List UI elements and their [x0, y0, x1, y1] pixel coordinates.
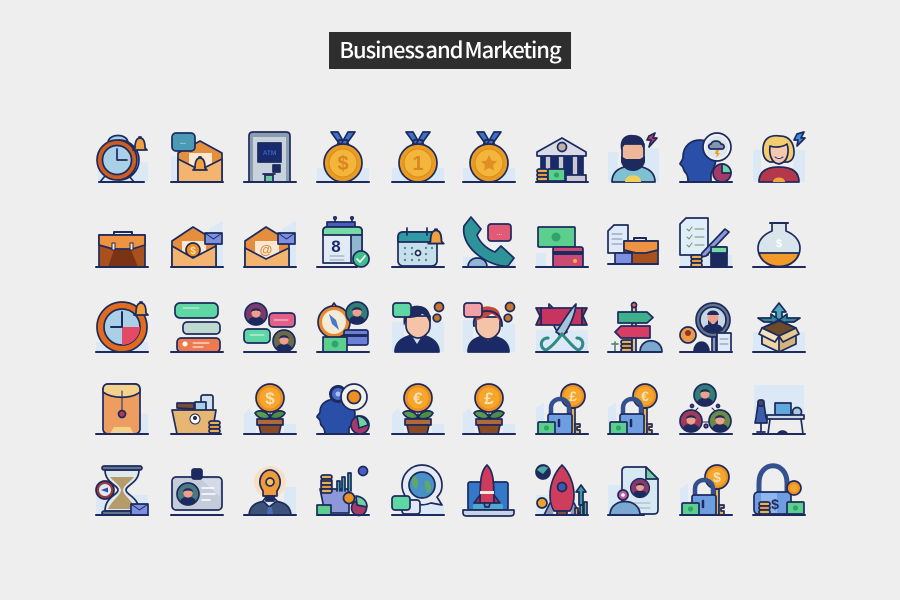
icon: envelope with bell and chat bubble	[171, 133, 223, 182]
icon: light bulb man	[244, 466, 296, 515]
icon: flask with orange liquid	[753, 223, 805, 267]
icon: bank building	[536, 138, 588, 182]
icon: pound plant	[463, 384, 515, 434]
icon: lock and euro key: €	[641, 388, 649, 404]
icon: number one medal: 1	[412, 153, 424, 175]
icon: lock and euro key	[608, 384, 658, 434]
icon: lock and pound key: £	[569, 388, 577, 404]
icon: rocket with planet and growth chart	[536, 465, 588, 515]
icon: large padlock with coins and cash	[753, 466, 805, 515]
icon: blonde woman with lightning	[753, 132, 805, 182]
title: Business and Marketing	[339, 33, 561, 65]
icon: number one medal	[392, 132, 444, 182]
icon: cash and credit card	[536, 227, 588, 267]
icon: large padlock with coins and cash: $	[771, 496, 779, 512]
icon: three chat bubbles	[171, 303, 223, 352]
icon: envelope with at sign: @	[260, 242, 272, 257]
icon: alarm clock	[97, 136, 148, 182]
icon: checklist with pen	[680, 218, 732, 267]
icon: head with storm cloud	[680, 133, 732, 182]
icon: hourglass with compass and envelope	[96, 466, 148, 515]
icon: globe in speech bubble	[392, 465, 444, 515]
icon: lock and dollar key: $	[713, 469, 721, 485]
icon: telephone with pink bubble	[463, 217, 515, 267]
icon: rocket launching from laptop	[463, 465, 514, 516]
icon: envelope with dollar: $	[190, 246, 196, 257]
icon: wall calendar with check: 8	[331, 237, 341, 256]
icon: envelope with at sign	[244, 221, 296, 267]
icon: envelope with dollar	[171, 221, 223, 267]
icon: dollar plant	[244, 384, 296, 434]
icon: telephone with pink bubble: ...	[497, 231, 502, 237]
icon: lock and dollar key	[680, 465, 732, 515]
icon: two people chatting	[244, 303, 296, 352]
icon: finance folder and charts	[317, 466, 369, 516]
icon: bearded man with lightning	[608, 133, 659, 182]
icon: dollar plant: $	[265, 389, 275, 408]
icon: euro plant	[392, 384, 444, 434]
icon: dollar medal: $	[337, 153, 349, 175]
icon: wall calendar with check	[317, 217, 369, 267]
icon: office desk	[753, 385, 805, 434]
icon: box with arrows	[753, 303, 805, 352]
icon: signpost	[608, 302, 662, 352]
icon: calendar with bell	[392, 228, 444, 267]
icon: dollar medal	[317, 132, 369, 182]
icon: large clock with red quadrant	[96, 302, 148, 352]
icon: head with gear and coin	[317, 384, 369, 434]
icon: three connected people	[680, 384, 732, 434]
icon: support agent man	[392, 302, 444, 352]
icon: string-tied envelope	[96, 384, 148, 434]
icon: briefcase	[96, 232, 148, 267]
icon: lock and pound key	[536, 384, 588, 434]
icon: ATM machine	[244, 132, 296, 182]
icon: envelope with bell and chat bubble: ...	[180, 139, 186, 146]
icon: document with globe and pin	[608, 467, 658, 515]
icon: documents and briefcase	[608, 225, 658, 264]
icon: pound plant: £	[484, 389, 494, 408]
icon: scissors cutting ribbon	[536, 304, 588, 352]
icon: euro plant: €	[413, 389, 423, 408]
icon: support agent woman	[463, 302, 515, 352]
icon: compass person card cash	[317, 302, 369, 352]
icon: flask with orange liquid: $	[776, 238, 782, 250]
icon: open folder	[171, 395, 221, 434]
icon: magnifier with person and document	[680, 303, 732, 352]
icon: star medal	[463, 132, 515, 182]
icon: ATM machine: ATM	[263, 150, 276, 157]
icon: ID card	[171, 469, 223, 515]
